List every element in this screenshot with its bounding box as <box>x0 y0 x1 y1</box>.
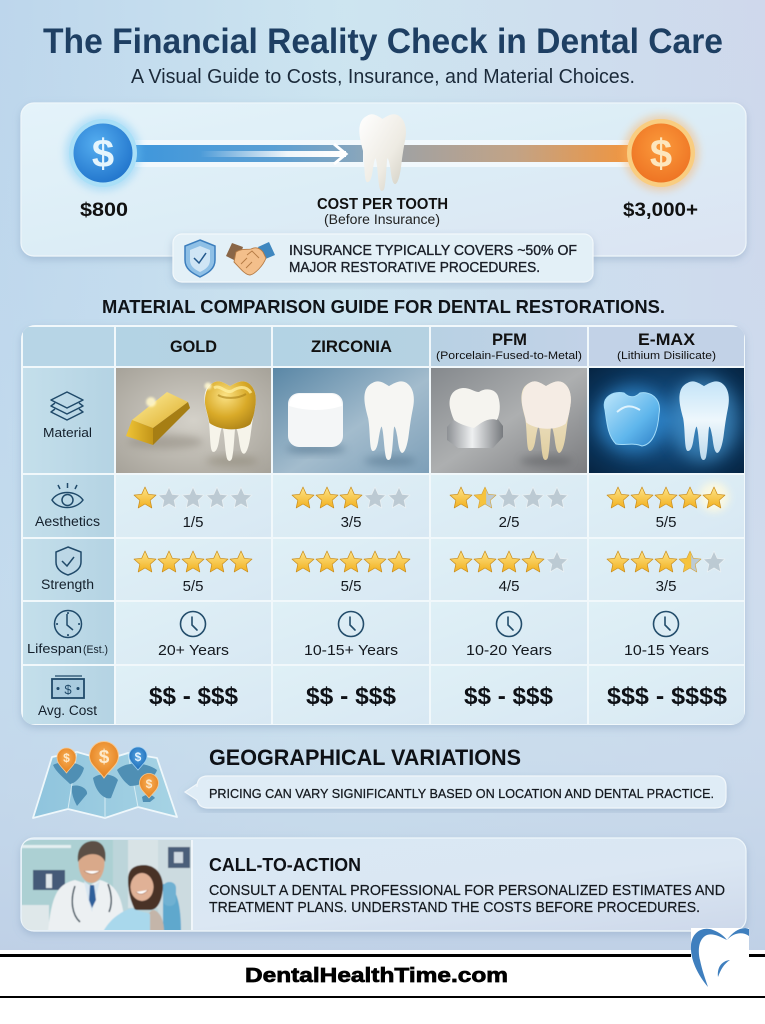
icon: blue dollar coin: $ <box>92 132 114 176</box>
low price: $800 <box>80 200 128 221</box>
row: lifespan values <box>158 612 709 659</box>
E-MAX aesthetics <box>607 482 729 531</box>
row: average cost values <box>149 683 728 710</box>
callout: insurance coverage <box>173 234 593 282</box>
column headings <box>170 331 716 362</box>
image: E-MAX glass crown and tooth <box>589 368 744 473</box>
zirconia strength <box>292 551 410 595</box>
E-MAX strength: 3/5 <box>656 578 676 595</box>
footer website: DentalHealthTime.com <box>245 965 508 987</box>
pin: orange small: $ <box>63 751 70 765</box>
column headings: (Porcelain-Fused-to-Metal) <box>436 350 582 362</box>
insurance text <box>289 243 577 276</box>
row: lifespan label <box>27 610 108 656</box>
callout: pricing varies: PRICING CAN VARY SIGNIFICANTLY BASED ON LOCATION AND DENTAL PRACTICE. <box>209 786 714 801</box>
comparison table <box>21 325 745 725</box>
photo: dentist and patient <box>21 838 193 932</box>
gold lifespan <box>158 612 229 659</box>
pin: orange small <box>57 748 76 773</box>
column headings: GOLD <box>170 338 217 356</box>
column headings: ZIRCONIA <box>311 338 392 356</box>
icon: banknote: $ <box>64 682 72 697</box>
heading: geographical variations: GEOGRAPHICAL VARIATIONS <box>209 745 521 770</box>
row: average cost label: Avg. Cost <box>38 703 97 718</box>
image: zirconia block and tooth <box>273 368 429 473</box>
header row backgrounds <box>23 327 744 366</box>
row: lifespan label: Lifespan <box>27 641 82 656</box>
pin: orange large: $ <box>99 747 110 768</box>
panel: cost per tooth <box>21 103 746 256</box>
heading: call to action: CALL-TO-ACTION <box>209 855 361 875</box>
zirconia strength: 5/5 <box>341 578 361 595</box>
E-MAX lifespan <box>624 612 709 659</box>
call to action text <box>209 883 725 916</box>
row: aesthetics label <box>35 483 100 529</box>
zirconia aesthetics: 3/5 <box>341 514 361 531</box>
footer <box>0 950 765 1024</box>
callout: pricing varies <box>185 776 726 808</box>
call to action text: TREATMENT PLANS. UNDERSTAND THE COSTS BEFORE PROCEDURES. <box>209 900 700 916</box>
icon: world map with price pins <box>33 742 177 818</box>
row: average cost label <box>38 676 97 718</box>
row: average cost values: $$ - $$$ <box>464 683 554 710</box>
icon: wall clock <box>54 610 82 638</box>
icon: orange dollar coin: $ <box>650 132 672 176</box>
image: gold bar and gold crown <box>116 368 271 473</box>
pin: blue: $ <box>135 750 142 764</box>
icon: orange dollar coin <box>623 115 699 191</box>
zirconia lifespan <box>304 612 398 659</box>
row: strength label <box>41 547 94 592</box>
pin: blue <box>129 747 147 770</box>
E-MAX strength <box>607 551 725 595</box>
row: strength ratings <box>134 551 725 595</box>
PFM strength <box>450 551 568 595</box>
column headings: E-MAX <box>638 331 695 349</box>
label column backgrounds <box>23 368 114 724</box>
icon: layers <box>51 392 83 420</box>
image: PFM crown and tooth <box>431 368 587 473</box>
icon: eye <box>52 483 83 508</box>
PFM lifespan: 10-20 Years <box>466 642 552 659</box>
row: average cost values: $$$ - $$$$ <box>607 683 728 710</box>
icon: tooth <box>359 114 406 191</box>
cost label: COST PER TOOTH <box>317 196 448 213</box>
title: The Financial Reality Check in Dental Care <box>43 22 723 61</box>
row: aesthetics label: Aesthetics <box>35 514 100 529</box>
row: material label <box>43 392 92 440</box>
row: material label: Material <box>43 425 92 440</box>
gold aesthetics: 1/5 <box>183 514 203 531</box>
pin: orange large <box>90 742 118 778</box>
PFM strength: 4/5 <box>499 578 519 595</box>
E-MAX aesthetics: 5/5 <box>656 514 676 531</box>
pin: orange right: $ <box>146 777 153 791</box>
icon: handshake <box>226 242 275 275</box>
call to action text: CONSULT A DENTAL PROFESSIONAL FOR PERSONALIZED ESTIMATES AND <box>209 883 725 899</box>
row: average cost values: $$ - $$$ <box>306 683 397 710</box>
zirconia aesthetics <box>292 487 410 531</box>
row: average cost values: $$ - $$$ <box>149 683 239 710</box>
high price: $3,000+ <box>623 200 698 221</box>
gold lifespan: 20+ Years <box>158 642 229 659</box>
insurance text: MAJOR RESTORATIVE PROCEDURES. <box>289 260 540 276</box>
PFM aesthetics: 2/5 <box>499 514 519 531</box>
pin: orange right <box>140 774 158 798</box>
cost label: (Before Insurance) <box>324 212 440 227</box>
cost label <box>317 196 448 227</box>
gold strength: 5/5 <box>183 578 203 595</box>
row: lifespan label: (Est.) <box>83 644 108 656</box>
zirconia lifespan: 10-15+ Years <box>304 642 398 659</box>
column headings: PFM <box>492 331 527 349</box>
icon: shield <box>185 240 215 277</box>
subtitle: A Visual Guide to Costs, Insurance, and Material Choices. <box>131 66 635 88</box>
icon: shield check <box>56 547 81 575</box>
PFM lifespan <box>466 612 552 659</box>
PFM aesthetics <box>450 487 568 531</box>
panel: call to action <box>21 838 746 932</box>
logo: blue tooth <box>691 928 749 987</box>
E-MAX lifespan: 10-15 Years <box>624 642 709 659</box>
icon: blue dollar coin <box>65 115 141 191</box>
insurance text: INSURANCE TYPICALLY COVERS ~50% OF <box>289 243 577 259</box>
heading: material comparison: MATERIAL COMPARISON GUIDE FOR DENTAL RESTORATIONS. <box>102 296 665 317</box>
gold aesthetics <box>134 487 252 531</box>
gold strength <box>134 551 252 595</box>
column headings: (Lithium Disilicate) <box>617 350 716 362</box>
row: strength label: Strength <box>41 577 94 592</box>
row: aesthetics ratings <box>134 482 729 531</box>
data cell backgrounds <box>116 475 744 724</box>
cost range bar <box>135 140 630 167</box>
